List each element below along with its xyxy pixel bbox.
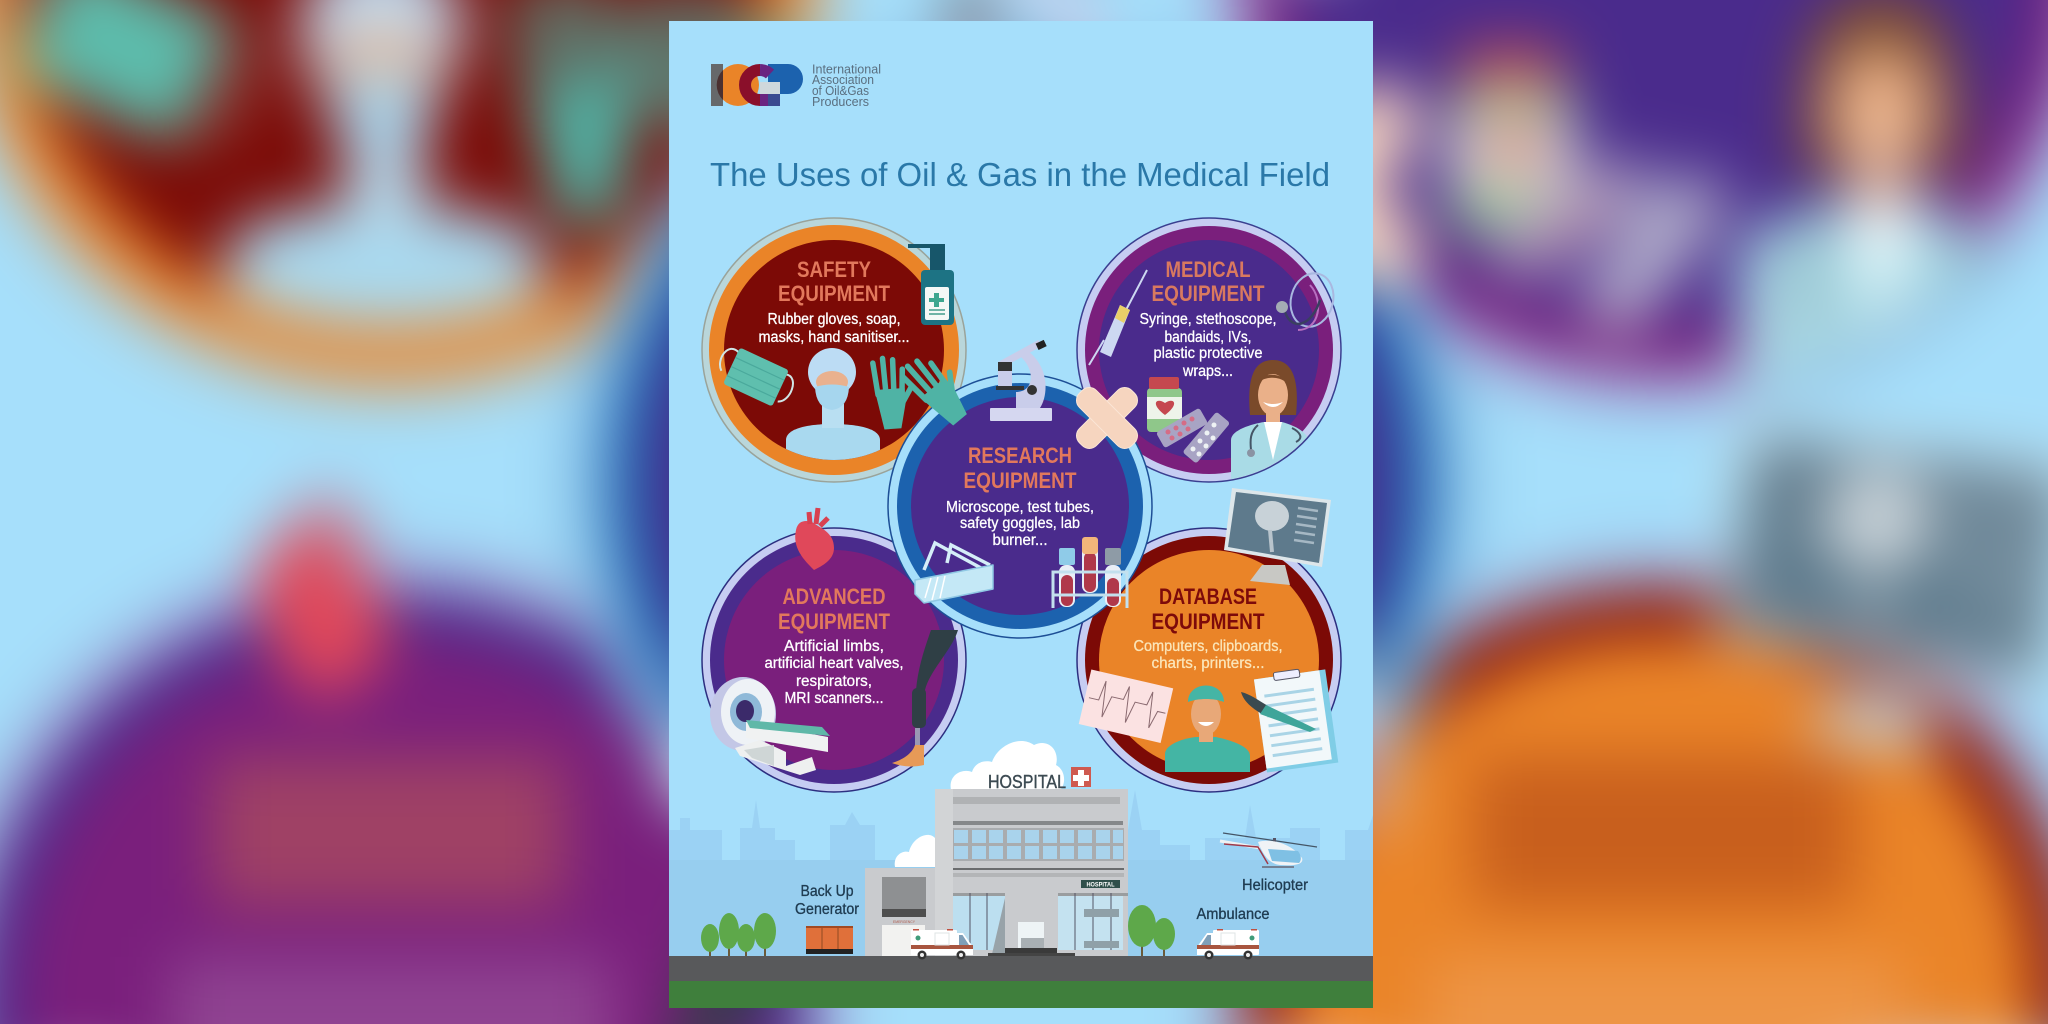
- text: medical equipment: [1140, 257, 1276, 380]
- icon: ECG chart: [1079, 669, 1173, 743]
- hospital rooftop sign: [988, 767, 1091, 792]
- label: back up generator: [795, 883, 859, 918]
- text: database equipment: DATABASE: [1159, 584, 1257, 609]
- trees right: [1128, 905, 1175, 956]
- icon: clipboard with pen: [1241, 665, 1338, 773]
- text: medical equipment: EQUIPMENT: [1152, 281, 1265, 306]
- icon: sticking plasters: [1072, 383, 1142, 453]
- hospital rooftop sign: HOSPITAL: [988, 772, 1066, 792]
- ambulance at hospital: [911, 929, 973, 960]
- panel: medical equipment disc: [1077, 218, 1341, 482]
- text: safety equipment: masks, hand sanitiser...: [758, 329, 910, 346]
- text: research equipment: [946, 443, 1094, 549]
- title: The Uses of Oil & Gas in the Medical Field: [710, 156, 1330, 193]
- text: medical equipment: Syringe, stethoscope,: [1140, 311, 1276, 328]
- text: database equipment: Computers, clipboards,: [1134, 638, 1282, 655]
- icon: male surgeon: [1165, 686, 1250, 772]
- logo wordmark: International: [812, 62, 881, 76]
- icon: test tubes in rack: [1053, 537, 1127, 608]
- text: research equipment: burner...: [992, 532, 1048, 549]
- logo wordmark: Producers: [812, 94, 869, 109]
- icon: rubber glove: [873, 357, 914, 430]
- panel: safety equipment disc: [702, 218, 966, 482]
- helicopter: [1220, 833, 1317, 867]
- icon: rubber glove tilted: [900, 348, 977, 430]
- sign: hospital door plate: [1081, 880, 1120, 888]
- icon: anatomical heart: [795, 508, 834, 570]
- icon: safety goggles: [915, 543, 993, 603]
- text: advanced equipment: ADVANCED: [782, 584, 886, 609]
- text: database equipment: charts, printers...: [1152, 655, 1264, 672]
- hospital left wing: EMERGENCY: [893, 919, 915, 924]
- icon: MRI scanner: [710, 677, 830, 775]
- icon: microscope: [990, 340, 1052, 421]
- icon: syringe: [1089, 270, 1147, 365]
- label: helicopter: Helicopter: [1242, 877, 1308, 894]
- text: research equipment: Microscope, test tubes,: [946, 499, 1094, 516]
- text: medical equipment: MEDICAL: [1166, 257, 1250, 282]
- circle panels and icons: [702, 218, 1341, 792]
- icon: prosthetic leg: [892, 630, 958, 766]
- poster sheet: [669, 21, 1373, 1008]
- text: advanced equipment: artificial heart valves,: [764, 655, 904, 672]
- icon: blister packs: [1156, 408, 1230, 464]
- hospital left wing: [865, 868, 935, 956]
- grass strip: [669, 981, 1373, 1008]
- small cloud: [895, 835, 935, 867]
- text: advanced equipment: EQUIPMENT: [778, 609, 890, 634]
- label: back up generator: Generator: [795, 901, 859, 918]
- label: ambulance: Ambulance: [1196, 906, 1270, 923]
- IOGP logo: [711, 62, 881, 109]
- back up generator: [806, 926, 853, 954]
- text: database equipment: EQUIPMENT: [1152, 609, 1265, 634]
- hospital tower: [935, 789, 1128, 956]
- ambulance right: [1197, 929, 1259, 960]
- text: advanced equipment: [764, 584, 904, 707]
- logo wordmark: [812, 62, 881, 109]
- text: safety equipment: Rubber gloves, soap,: [768, 311, 900, 328]
- text: research equipment: safety goggles, lab: [960, 515, 1080, 532]
- text: safety equipment: [758, 257, 910, 346]
- text: medical equipment: bandaids, IVs,: [1164, 329, 1252, 346]
- text: advanced equipment: Artificial limbs,: [784, 638, 884, 655]
- cloud behind hospital: [951, 741, 1064, 790]
- icon: female doctor: [1231, 360, 1310, 480]
- text: research equipment: RESEARCH: [968, 443, 1072, 468]
- label: back up generator: Back Up: [800, 883, 854, 900]
- text: safety equipment: SAFETY: [797, 257, 871, 282]
- text: safety equipment: EQUIPMENT: [778, 281, 890, 306]
- icon: monitor with brain scan: [1224, 488, 1331, 585]
- panel: database equipment disc: [1077, 528, 1341, 792]
- text: database equipment: [1134, 584, 1282, 672]
- icon: surgeon in cap and mask: [786, 348, 880, 460]
- icon: pill jar: [1147, 377, 1182, 432]
- skyline silhouette: [669, 790, 1373, 956]
- icon: face mask: [712, 342, 799, 411]
- text: advanced equipment: MRI scanners...: [784, 690, 884, 707]
- sign: hospital door plate: HOSPITAL: [1086, 882, 1115, 888]
- panel: research equipment disc: [888, 374, 1152, 638]
- text: medical equipment: plastic protective: [1154, 345, 1262, 362]
- road: [669, 956, 1373, 982]
- text: advanced equipment: respirators,: [796, 673, 872, 690]
- hospital scene: [701, 741, 1317, 960]
- logo wordmark: Association: [812, 72, 874, 87]
- text: research equipment: EQUIPMENT: [964, 468, 1077, 493]
- icon: stethoscope: [1276, 268, 1339, 332]
- icon: hand sanitiser bottle: [908, 244, 954, 325]
- text: medical equipment: wraps...: [1182, 363, 1233, 380]
- trees left: [701, 913, 776, 956]
- panel: advanced equipment disc: [702, 528, 966, 792]
- logo wordmark: of Oil&Gas: [812, 83, 869, 98]
